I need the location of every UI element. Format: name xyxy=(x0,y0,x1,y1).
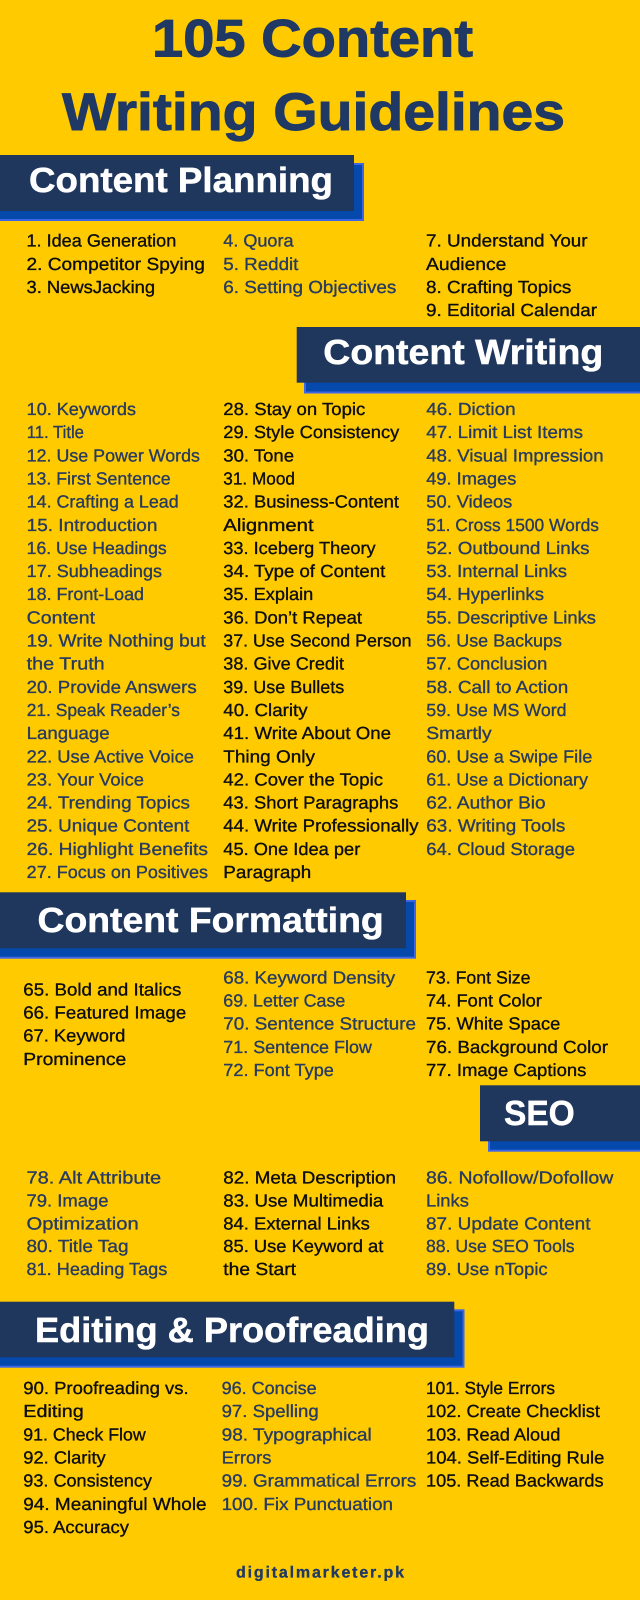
list: items 46-64: 57. Conclusion xyxy=(426,654,547,674)
list: items 90-95: 95. Accuracy xyxy=(23,1517,129,1537)
list: items 90-95: 92. Clarity xyxy=(23,1448,106,1468)
list: items 46-64: 48. Visual Impression xyxy=(426,445,604,465)
list: items 28-45: 29. Style Consistency xyxy=(223,422,400,442)
list: items 96-100: 98. Typographical xyxy=(222,1424,372,1444)
list: items 82-85: 82. Meta Description xyxy=(223,1167,396,1187)
list: items 82-85: 83. Use Multimedia xyxy=(223,1190,384,1210)
list: items 10-27: 13. First Sentence xyxy=(27,468,171,488)
list: items 10-27: 20. Provide Answers xyxy=(27,677,197,697)
list: items 46-64: 53. Internal Links xyxy=(426,561,567,581)
list: items 28-45: 44. Write Professionally xyxy=(223,816,419,836)
section banner: SEO xyxy=(480,1085,640,1151)
list: items 86-89: 86. Nofollow/Dofollow xyxy=(426,1167,614,1187)
list: items 10-27: 15. Introduction xyxy=(27,515,157,535)
list: items 78-81: 81. Heading Tags xyxy=(26,1259,168,1279)
list: items 96-100: 97. Spelling xyxy=(222,1401,319,1421)
list: items 7-9: 7. Understand Your xyxy=(426,231,588,251)
footer website: digitalmarketer.pk xyxy=(236,1565,404,1582)
list: items 65-67: 66. Featured Image xyxy=(23,1002,186,1022)
list: items 101-105 xyxy=(426,1378,604,1491)
list: items 10-27: 17. Subheadings xyxy=(27,561,162,581)
list: items 65-67: 67. Keyword xyxy=(23,1026,125,1046)
list: items 28-45: 34. Type of Content xyxy=(223,561,385,581)
list: items 101-105: 104. Self-Editing Rule xyxy=(426,1448,604,1468)
list: items 28-45: Thing Only xyxy=(223,746,315,766)
list: items 101-105: 101. Style Errors xyxy=(426,1378,555,1398)
section banner: SEO: SEO xyxy=(504,1094,575,1133)
list: items 28-45: 43. Short Paragraphs xyxy=(223,793,399,813)
list: items 28-45: 45. One Idea per xyxy=(223,839,360,859)
list: items 28-45: 31. Mood xyxy=(223,468,295,488)
list: items 10-27: the Truth xyxy=(27,654,105,674)
list: items 28-45: 33. Iceberg Theory xyxy=(223,538,376,558)
section banner: Editing & Proofreading: Editing & Proofreading xyxy=(35,1311,429,1350)
list: items 46-64: 52. Outbound Links xyxy=(426,538,590,558)
list: items 10-27: 21. Speak Reader’s xyxy=(27,700,180,720)
list: items 28-45: 30. Tone xyxy=(223,445,294,465)
list: items 46-64: 46. Diction xyxy=(426,399,516,419)
list: items 28-45: 32. Business-Content xyxy=(223,492,399,512)
list: items 28-45: Paragraph xyxy=(223,862,311,882)
list: items 10-27: Language xyxy=(27,723,110,743)
list: items 96-100: 100. Fix Punctuation xyxy=(222,1494,393,1514)
list: items 46-64: 61. Use a Dictionary xyxy=(426,769,588,789)
list: items 82-85: 84. External Links xyxy=(223,1214,370,1234)
list: items 10-27: 26. Highlight Benefits xyxy=(27,839,208,859)
list: items 101-105: 102. Create Checklist xyxy=(426,1401,600,1421)
list: items 65-67: Prominence xyxy=(23,1049,126,1069)
list: items 78-81 xyxy=(26,1167,168,1279)
list: items 10-27: Content xyxy=(27,607,95,627)
list: items 46-64: 55. Descriptive Links xyxy=(426,607,596,627)
list: items 28-45: 38. Give Credit xyxy=(223,654,344,674)
list: items 7-9: Audience xyxy=(426,254,506,274)
list: items 10-27: 24. Trending Topics xyxy=(27,793,190,813)
list: items 10-27 xyxy=(27,399,208,882)
list: items 46-64: 47. Limit List Items xyxy=(426,422,583,442)
list: items 68-72: 71. Sentence Flow xyxy=(223,1037,372,1057)
list: items 68-72: 69. Letter Case xyxy=(223,990,345,1010)
list: items 46-64: Smartly xyxy=(426,723,492,743)
list: items 28-45 xyxy=(223,399,419,882)
list: items 90-95: 94. Meaningful Whole xyxy=(23,1494,207,1514)
section banner: Content Writing: Content Writing xyxy=(323,333,603,372)
list: items 28-45: 28. Stay on Topic xyxy=(223,399,366,419)
list: items 82-85 xyxy=(223,1167,396,1279)
list: items 90-95 xyxy=(23,1378,207,1537)
list: items 46-64: 56. Use Backups xyxy=(426,630,562,650)
list: items 82-85: 85. Use Keyword at xyxy=(223,1236,383,1256)
list: items 10-27: 27. Focus on Positives xyxy=(27,862,208,882)
list: items 1-3: 1. Idea Generation xyxy=(26,231,176,251)
list: items 90-95: 90. Proofreading vs. xyxy=(23,1378,189,1398)
list: items 1-3 xyxy=(26,231,205,297)
list: items 46-64: 51. Cross 1500 Words xyxy=(426,515,599,535)
list: items 90-95: Editing xyxy=(23,1401,84,1421)
list: items 46-64: 59. Use MS Word xyxy=(426,700,567,720)
list: items 82-85: the Start xyxy=(223,1259,296,1279)
list: items 28-45: 37. Use Second Person xyxy=(223,630,412,650)
list: items 10-27: 23. Your Voice xyxy=(27,769,144,789)
list: items 90-95: 93. Consistency xyxy=(23,1471,152,1491)
list: items 7-9: 8. Crafting Topics xyxy=(426,277,572,297)
list: items 86-89: 87. Update Content xyxy=(426,1214,591,1234)
list: items 86-89: 89. Use nTopic xyxy=(426,1259,548,1279)
list: items 65-67 xyxy=(23,979,186,1069)
list: items 86-89 xyxy=(426,1167,614,1279)
list: items 73-77 xyxy=(426,967,608,1080)
list: items 68-72: 72. Font Type xyxy=(223,1060,334,1080)
title: 105 Content xyxy=(152,10,473,69)
list: items 78-81: 79. Image xyxy=(26,1190,108,1210)
list: items 90-95: 91. Check Flow xyxy=(23,1424,146,1444)
list: items 101-105: 103. Read Aloud xyxy=(426,1424,560,1444)
list: items 28-45: 35. Explain xyxy=(223,584,313,604)
list: items 46-64 xyxy=(426,399,604,859)
list: items 86-89: 88. Use SEO Tools xyxy=(426,1236,575,1256)
list: items 46-64: 64. Cloud Storage xyxy=(426,839,575,859)
list: items 10-27: 14. Crafting a Lead xyxy=(27,492,179,512)
list: items 96-100 xyxy=(222,1378,417,1514)
list: items 28-45: Alignment xyxy=(223,515,314,535)
list: items 10-27: 10. Keywords xyxy=(27,399,136,419)
list: items 96-100: Errors xyxy=(222,1448,272,1468)
list: items 10-27: 12. Use Power Words xyxy=(27,445,200,465)
list: items 10-27: 11. Title xyxy=(27,422,84,442)
list: items 4-6: 5. Reddit xyxy=(223,254,299,274)
list: items 73-77: 76. Background Color xyxy=(426,1037,608,1057)
list: items 78-81: 78. Alt Attribute xyxy=(26,1167,161,1187)
title xyxy=(62,10,565,142)
list: items 10-27: 25. Unique Content xyxy=(27,816,190,836)
list: items 73-77: 75. White Space xyxy=(426,1014,560,1034)
list: items 1-3: 3. NewsJacking xyxy=(26,277,155,297)
list: items 65-67: 65. Bold and Italics xyxy=(23,979,182,999)
list: items 73-77: 77. Image Captions xyxy=(426,1060,587,1080)
list: items 73-77: 73. Font Size xyxy=(426,967,530,987)
list: items 96-100: 99. Grammatical Errors xyxy=(222,1471,417,1491)
section banner: Content Formatting xyxy=(0,892,415,958)
list: items 68-72 xyxy=(223,967,416,1080)
section banner: Editing & Proofreading xyxy=(0,1302,464,1367)
list: items 86-89: Links xyxy=(426,1190,469,1210)
list: items 46-64: 50. Videos xyxy=(426,492,513,512)
list: items 46-64: 49. Images xyxy=(426,468,517,488)
list: items 78-81: 80. Title Tag xyxy=(26,1236,128,1256)
list: items 68-72: 70. Sentence Structure xyxy=(223,1014,416,1034)
list: items 46-64: 62. Author Bio xyxy=(426,793,546,813)
list: items 4-6: 6. Setting Objectives xyxy=(223,277,397,297)
list: items 28-45: 41. Write About One xyxy=(223,723,391,743)
list: items 4-6: 4. Quora xyxy=(223,231,294,251)
list: items 28-45: 40. Clarity xyxy=(223,700,308,720)
section banner: Content Writing xyxy=(297,327,640,392)
section banner: Content Planning xyxy=(0,155,363,220)
list: items 78-81: Optimization xyxy=(26,1214,139,1234)
list: items 7-9 xyxy=(426,231,597,320)
list: items 46-64: 63. Writing Tools xyxy=(426,816,566,836)
list: items 1-3: 2. Competitor Spying xyxy=(26,254,205,274)
list: items 7-9: 9. Editorial Calendar xyxy=(426,300,597,320)
list: items 28-45: 42. Cover the Topic xyxy=(223,769,383,789)
list: items 46-64: 54. Hyperlinks xyxy=(426,584,544,604)
title: Writing Guidelines xyxy=(62,83,565,142)
list: items 28-45: 36. Don’t Repeat xyxy=(223,607,362,627)
list: items 46-64: 60. Use a Swipe File xyxy=(426,746,592,766)
list: items 68-72: 68. Keyword Density xyxy=(223,967,395,987)
list: items 96-100: 96. Concise xyxy=(222,1378,317,1398)
list: items 73-77: 74. Font Color xyxy=(426,990,542,1010)
section banner: Content Formatting: Content Formatting xyxy=(38,901,384,940)
list: items 10-27: 19. Write Nothing but xyxy=(27,630,206,650)
list: items 10-27: 16. Use Headings xyxy=(27,538,167,558)
list: items 10-27: 18. Front-Load xyxy=(27,584,144,604)
section banner: Content Planning: Content Planning xyxy=(29,161,333,200)
list: items 10-27: 22. Use Active Voice xyxy=(27,746,194,766)
list: items 28-45: 39. Use Bullets xyxy=(223,677,345,697)
list: items 101-105: 105. Read Backwards xyxy=(426,1471,604,1491)
list: items 46-64: 58. Call to Action xyxy=(426,677,568,697)
list: items 4-6 xyxy=(223,231,397,297)
